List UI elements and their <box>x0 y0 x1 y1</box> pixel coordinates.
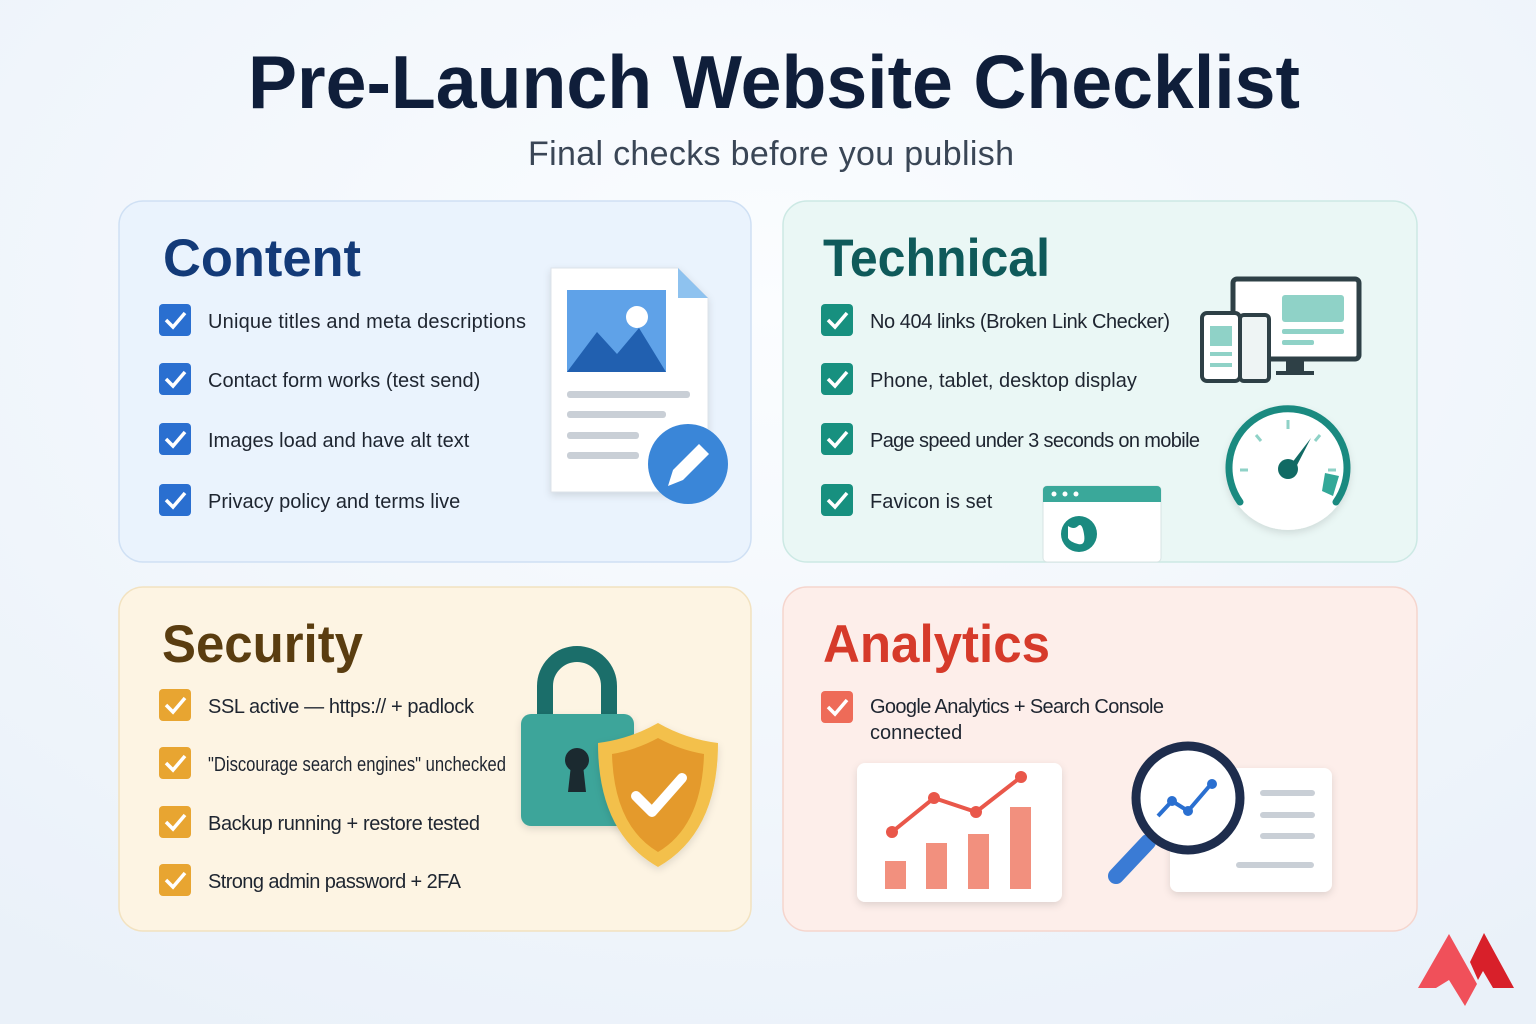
checklist: security: Backup running + restore tested <box>208 813 480 835</box>
checklist: technical: Page speed under 3 seconds on mobile <box>870 430 1200 452</box>
subtitle: Final checks before you publish <box>528 135 1014 173</box>
checklist: content: Privacy policy and terms live <box>208 491 460 513</box>
checklist: technical: Favicon is set <box>870 491 993 513</box>
icon: speedometer <box>1226 406 1350 530</box>
icon: devices <box>1202 279 1359 381</box>
logo <box>1418 933 1514 1006</box>
checklist: security <box>159 689 506 896</box>
heading: content: Content <box>163 229 361 288</box>
panel: analytics <box>783 587 1417 931</box>
icon: browser favicon <box>1043 486 1161 562</box>
checklist: technical: No 404 links (Broken Link Checker) <box>870 311 1170 333</box>
checklist: content <box>159 304 526 516</box>
title: Pre-Launch Website Checklist <box>248 40 1300 124</box>
checklist: technical <box>821 304 1200 516</box>
panel: content <box>119 201 751 562</box>
checklist: analytics: Google Analytics + Search Console <box>870 696 1164 718</box>
icon: document with pencil <box>551 268 728 504</box>
checklist: analytics <box>821 691 1164 744</box>
checklist: security: SSL active — https:// + padlock <box>208 696 475 718</box>
checklist: analytics: connected <box>870 722 962 744</box>
heading: analytics: Analytics <box>823 615 1050 674</box>
checklist: technical: Phone, tablet, desktop display <box>870 370 1137 392</box>
icon: magnifier on report <box>1116 746 1332 892</box>
icon: padlock and shield <box>521 654 718 867</box>
checklist: security: Strong admin password + 2FA <box>208 871 462 893</box>
panel: security <box>119 587 751 931</box>
checklist: security: "Discourage search engines" unchecked <box>208 754 506 776</box>
heading: technical: Technical <box>823 229 1050 288</box>
heading: security: Security <box>162 615 364 674</box>
checklist: content: Unique titles and meta descriptions <box>208 311 526 333</box>
checklist: content: Images load and have alt text <box>208 430 470 452</box>
panel: technical <box>783 201 1417 562</box>
chart: bar and line <box>857 763 1062 902</box>
checklist: content: Contact form works (test send) <box>208 370 480 392</box>
